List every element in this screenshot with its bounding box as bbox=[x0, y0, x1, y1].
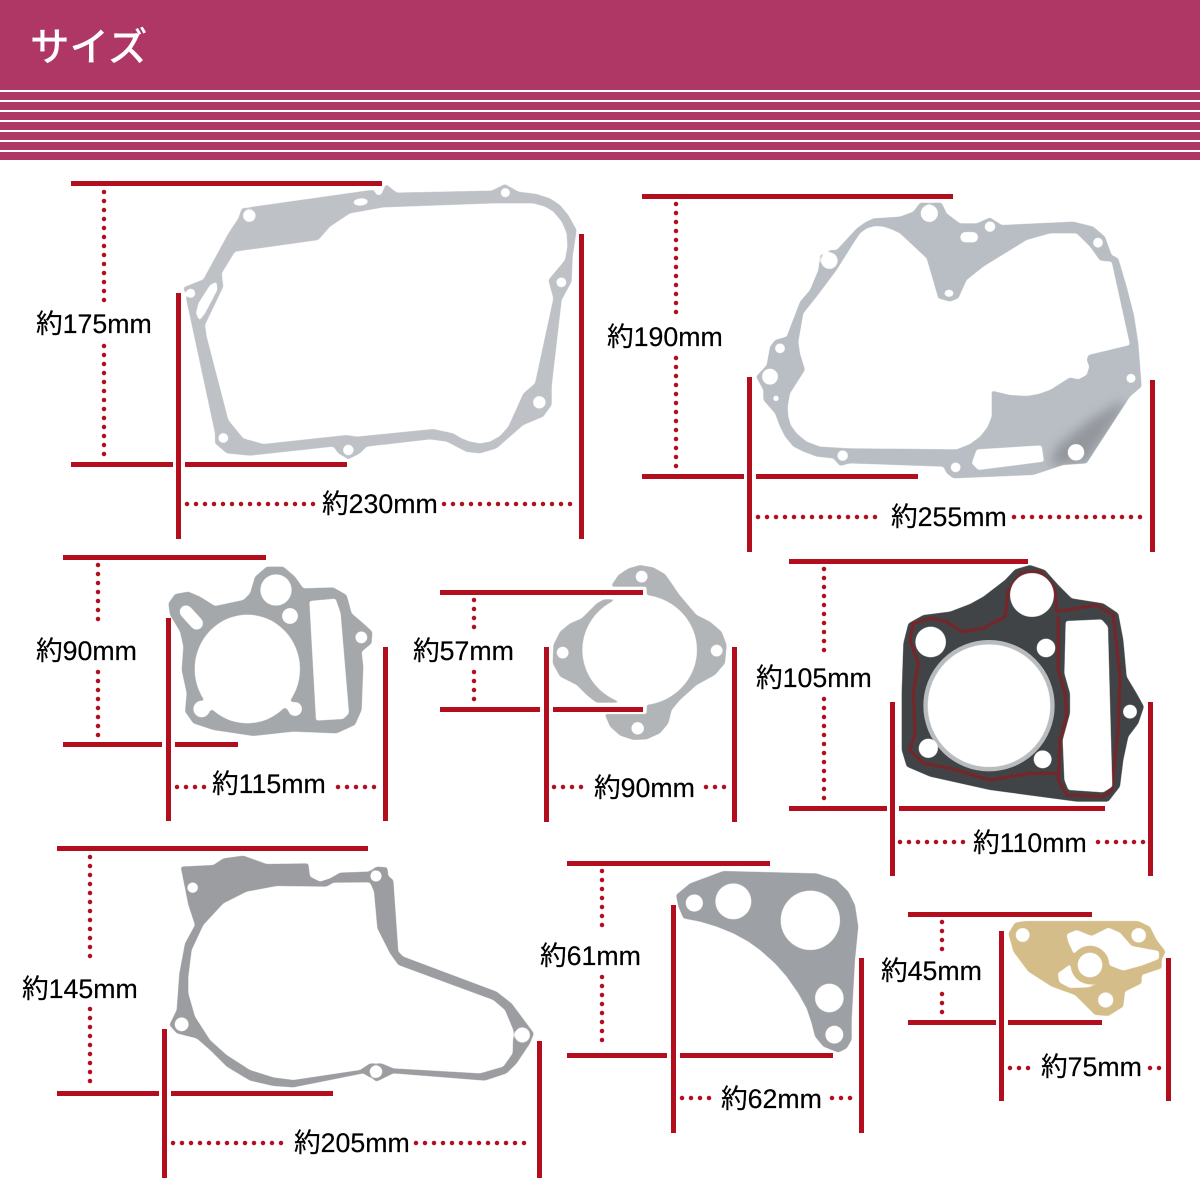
dimensions: 190mm / 255mm bbox=[607, 194, 1155, 552]
dimensions: 175mm / 230mm bbox=[36, 181, 584, 539]
label: height 90mm: 約90mm bbox=[36, 636, 137, 666]
label: height 105mm: 約105mm bbox=[756, 663, 872, 693]
dimensions: 45mm / 75mm bbox=[881, 912, 1171, 1101]
label: width 255mm: 約255mm bbox=[891, 502, 1007, 532]
gasket 2: left crankcase bbox=[753, 200, 1145, 482]
label: width 110mm: 約110mm bbox=[973, 828, 1087, 858]
label: width 205mm: 約205mm bbox=[294, 1128, 410, 1158]
label: width 115mm: 約115mm bbox=[212, 769, 326, 799]
label: height 45mm: 約45mm bbox=[881, 956, 982, 986]
label: width 90mm: 約90mm bbox=[594, 773, 695, 803]
label: width 62mm: 約62mm bbox=[721, 1084, 822, 1114]
dimensions: 145mm / 205mm bbox=[22, 846, 542, 1178]
label: height 175mm: 約175mm bbox=[36, 309, 152, 339]
label: height 57mm: 約57mm bbox=[413, 636, 514, 666]
title: サイズ bbox=[30, 16, 147, 73]
gasket 6: generator cover bbox=[167, 853, 537, 1090]
label: height 145mm: 約145mm bbox=[22, 974, 138, 1004]
dimensions: 57mm / 90mm bbox=[413, 590, 737, 822]
silver bore ring bbox=[926, 642, 1052, 769]
dimensions: 105mm / 110mm bbox=[756, 559, 1153, 876]
gasket 8: tan oil pump gasket bbox=[1005, 918, 1168, 1018]
dimensions: 61mm / 62mm bbox=[540, 861, 864, 1133]
label: width 230mm: 約230mm bbox=[322, 489, 438, 519]
shaded area of gasket 2 bbox=[1050, 403, 1127, 467]
label: height 61mm: 約61mm bbox=[540, 941, 641, 971]
red seal line bbox=[910, 572, 1120, 797]
gasket 3: cylinder base bbox=[165, 563, 375, 740]
header banner bbox=[0, 0, 1200, 160]
dimensions: 90mm / 115mm bbox=[36, 555, 388, 821]
gasket 4: four-lobed cam gasket bbox=[550, 563, 730, 743]
gasket 5: dark cylinder head gasket bbox=[898, 562, 1147, 805]
label: height 190mm: 約190mm bbox=[607, 322, 723, 352]
gasket 7: curved bracket gasket bbox=[673, 868, 862, 1055]
label: width 75mm: 約75mm bbox=[1041, 1052, 1142, 1082]
gasket 1: right crankcase cover bbox=[177, 180, 580, 463]
